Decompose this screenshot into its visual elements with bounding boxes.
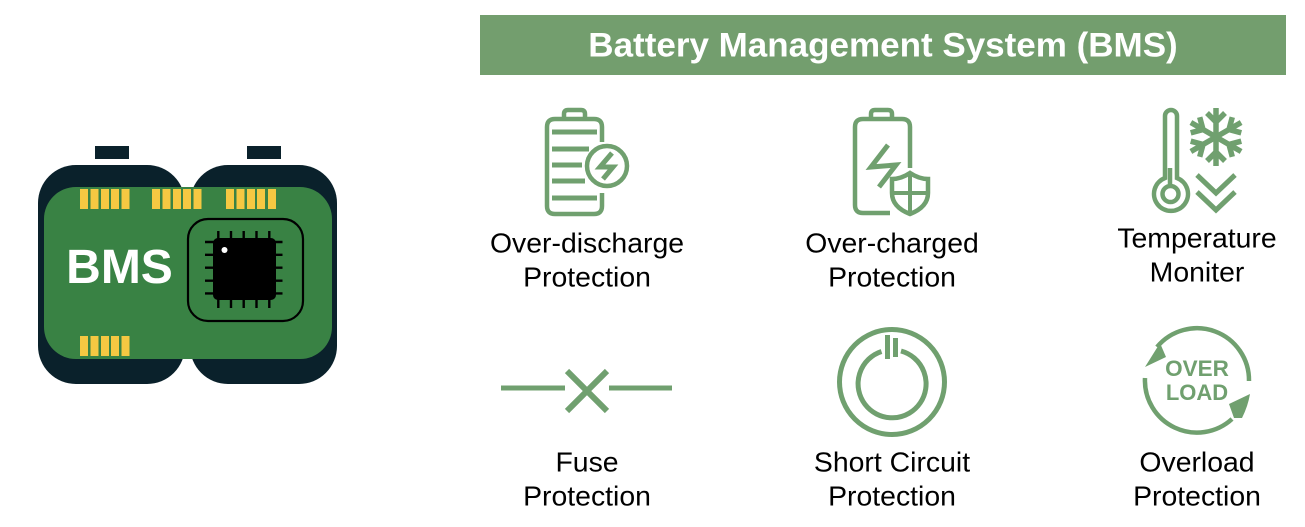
illustration: BMS battery board [38,146,337,384]
icon: fuse [501,371,672,411]
item: over-charged protection [805,110,979,292]
gold contacts [80,189,276,356]
title banner [480,15,1286,75]
label: Short Circuit [814,447,970,477]
icon: overload cycle [1145,328,1250,433]
item: short circuit protection [814,330,970,511]
label: Moniter [1150,257,1244,287]
label: Protection [1133,481,1261,511]
icon: overload cycle: OVER [1165,356,1229,381]
circuit board [44,187,332,359]
icon: overload cycle: LOAD [1166,380,1228,405]
BMS label: BMS [66,241,173,294]
label: Overload [1139,447,1255,477]
label: Over-discharge [490,228,684,258]
icon: thermometer, snowflake, chevrons [1154,108,1246,211]
chip frame [188,219,303,321]
item: fuse protection [501,371,672,511]
microchip [205,231,282,308]
label: Temperature [1117,223,1277,253]
label: Protection [828,262,956,292]
label: Protection [828,481,956,511]
label: Protection [523,262,651,292]
battery terminals [95,146,281,159]
icon: battery with bolt [547,110,627,214]
title banner: Battery Management System (BMS) [588,27,1178,64]
item: overload protection [1133,328,1261,511]
battery cells [38,165,337,384]
icon: battery with shield [855,110,928,214]
item: over-discharge protection [490,110,684,292]
label: Protection [523,481,651,511]
icon: power symbol [840,330,944,434]
item: temperature monitor [1117,108,1277,287]
label: Over-charged [805,228,979,258]
label: Fuse [555,447,619,477]
